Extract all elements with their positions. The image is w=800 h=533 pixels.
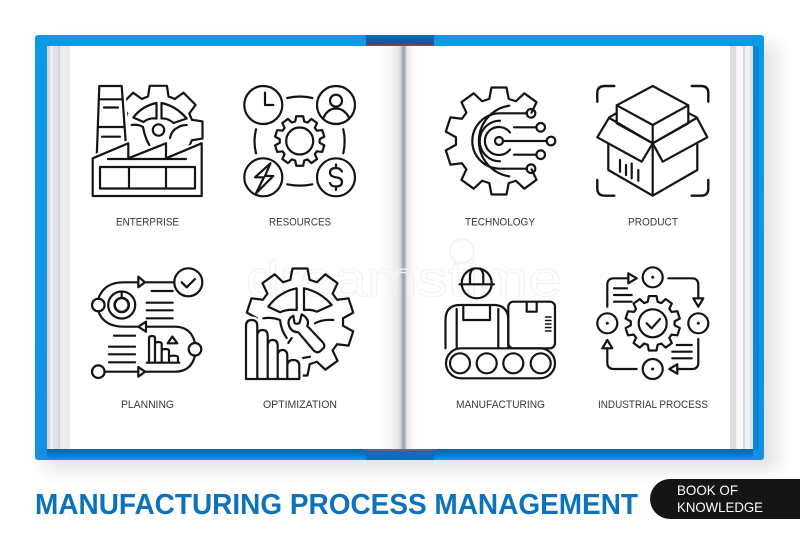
gear spokes xyxy=(132,103,187,145)
gear xyxy=(247,269,353,375)
right page stack xyxy=(730,46,753,449)
nodes xyxy=(597,267,708,379)
circuit arcs xyxy=(472,106,527,176)
left page stack xyxy=(47,46,70,449)
icon: manufacturing xyxy=(446,268,555,378)
open gear xyxy=(446,88,537,194)
title: MANUFACTURING PROCESS MANAGEMENT xyxy=(35,489,638,521)
bottom spine band xyxy=(366,449,434,460)
book cover xyxy=(35,35,764,460)
mini bar chart xyxy=(147,336,179,363)
center gear xyxy=(626,296,680,351)
spine fold xyxy=(378,46,418,449)
worker body xyxy=(446,305,508,348)
top box xyxy=(617,86,688,143)
badge: book of knowledge: KNOWLEDGE xyxy=(677,499,763,515)
chimney halo xyxy=(97,86,126,158)
chimney xyxy=(97,86,126,158)
check circle xyxy=(174,268,202,296)
dollar xyxy=(317,158,355,196)
icon: planning xyxy=(92,268,202,378)
wrench xyxy=(289,314,324,352)
factory halo xyxy=(93,143,202,196)
cover inner shade right xyxy=(753,46,759,450)
pages xyxy=(70,46,730,449)
clock xyxy=(244,86,282,124)
book xyxy=(35,35,778,470)
cover inner shade bottom xyxy=(47,449,753,459)
flow nodes xyxy=(92,299,201,378)
icon: technology xyxy=(446,88,555,194)
arrowheads xyxy=(138,277,146,377)
lightning xyxy=(244,158,282,196)
icon: enterprise xyxy=(93,86,202,196)
text lines lower xyxy=(109,336,135,362)
top spine band xyxy=(366,35,434,46)
conveyor xyxy=(446,348,555,378)
label: optimization: OPTIMIZATION xyxy=(263,399,337,411)
gear xyxy=(275,116,324,166)
text lines upper xyxy=(147,291,173,318)
label: industrial process: INDUSTRIAL PROCESS xyxy=(598,399,708,411)
open box xyxy=(608,143,697,196)
label: resources: RESOURCES xyxy=(269,216,331,228)
flaps xyxy=(597,113,707,162)
label: manufacturing: MANUFACTURING xyxy=(456,399,545,411)
ring chart xyxy=(108,292,135,318)
book shadow xyxy=(44,44,778,470)
label: planning: PLANNING xyxy=(121,399,174,411)
cycle arrows xyxy=(602,273,703,374)
label: enterprise: ENTERPRISE xyxy=(116,216,179,228)
factory xyxy=(93,143,202,196)
circuit nodes xyxy=(495,109,555,173)
icon: industrial process xyxy=(597,267,708,379)
bars halo xyxy=(246,320,299,379)
barcode xyxy=(620,160,638,181)
badge: book of knowledge: BOOK OF xyxy=(677,482,738,498)
connecting arcs xyxy=(254,96,345,186)
list lines xyxy=(614,288,692,358)
corner brackets xyxy=(597,86,708,196)
label: technology: TECHNOLOGY xyxy=(465,216,535,228)
gear sectors xyxy=(263,288,333,358)
gear xyxy=(114,86,202,174)
watermark xyxy=(246,239,562,307)
label: product: PRODUCT xyxy=(628,216,678,228)
person xyxy=(317,86,355,124)
icon: product xyxy=(597,86,708,196)
worker head xyxy=(460,268,494,298)
bar chart xyxy=(246,320,299,379)
parcel xyxy=(508,302,555,348)
badge: book of knowledge xyxy=(650,479,800,519)
watermark: dreamstime xyxy=(246,251,562,307)
circuit lines xyxy=(503,127,547,155)
icon: resources xyxy=(244,86,355,196)
flow path xyxy=(98,282,195,372)
icon: optimization xyxy=(246,269,353,379)
